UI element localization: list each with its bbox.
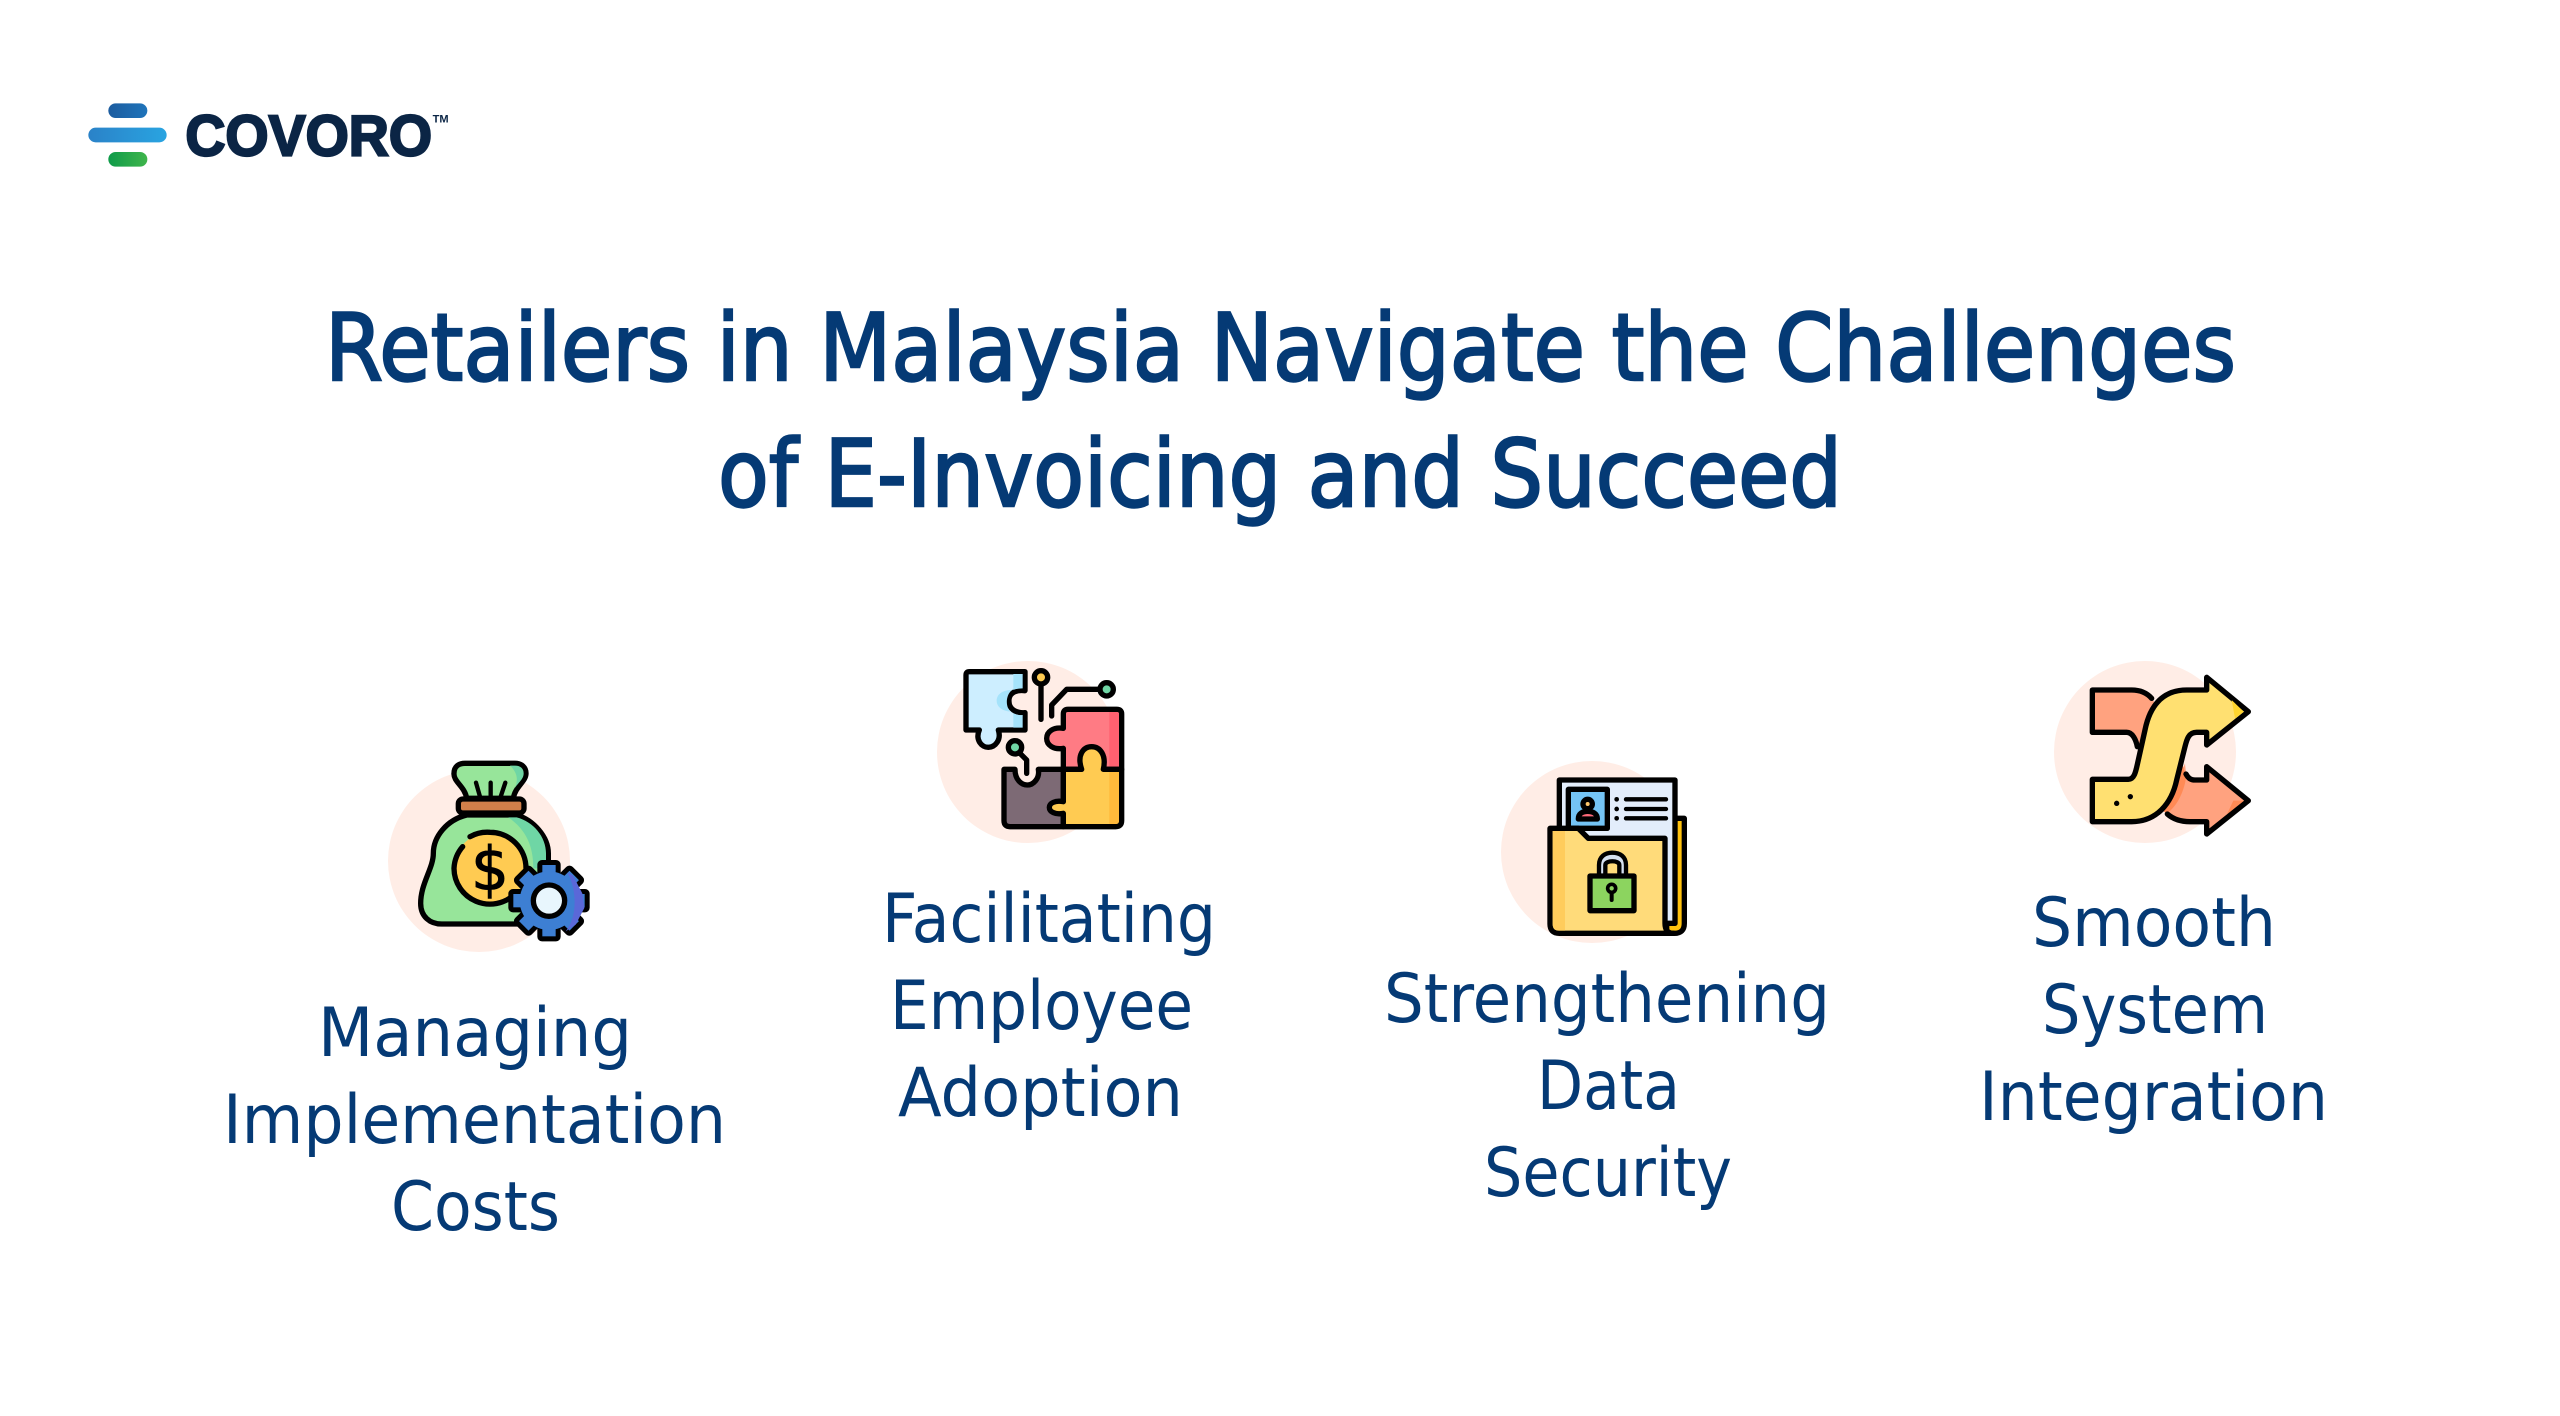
panel: Facilitating Employee Adoption — [882, 661, 1216, 1133]
label: Facilitating Employee Adoption: Adoption — [898, 1054, 1183, 1133]
panel: Smooth System Integration — [1979, 661, 2328, 1137]
label: Strengthening Data Security — [1384, 960, 1830, 1213]
label: Facilitating Employee Adoption — [882, 880, 1216, 1133]
label: Facilitating Employee Adoption: Facilitating — [882, 880, 1216, 959]
label: Strengthening Data Security: Security — [1484, 1134, 1732, 1213]
label: Strengthening Data Security: Data — [1537, 1047, 1680, 1126]
icon: locked folder — [1501, 761, 1684, 943]
panel: Strengthening Data Security — [1384, 761, 1830, 1213]
icon: puzzle pieces — [937, 661, 1122, 843]
puzzle drawing — [966, 671, 1122, 827]
title line 2: of E-Invoicing and Succeed — [718, 420, 1842, 528]
panel: Managing Implementation Costs — [223, 763, 726, 1247]
icon backdrop circle — [1501, 761, 1683, 943]
label: Managing Implementation Costs: Implementation — [223, 1081, 726, 1160]
label: Smooth System Integration: Integration — [1979, 1058, 2328, 1137]
folder drawing — [1550, 780, 1684, 933]
logo wordmark: COVORO — [185, 104, 432, 168]
label: Smooth System Integration: Smooth — [2032, 884, 2276, 963]
icon: money bag with gear — [388, 763, 587, 952]
label: Managing Implementation Costs: Managing — [318, 994, 632, 1073]
title — [325, 294, 2236, 528]
logo: Covoro — [88, 103, 449, 168]
icon backdrop circle — [937, 661, 1119, 843]
icon: crossing arrows — [2054, 661, 2248, 843]
money bag drawing: $ — [471, 834, 509, 903]
label: Facilitating Employee Adoption: Employee — [890, 967, 1193, 1046]
money bag drawing — [421, 763, 587, 939]
label: Smooth System Integration: System — [2042, 971, 2268, 1050]
logo trademark: TM — [433, 114, 449, 126]
label: Strengthening Data Security: Strengthening — [1384, 960, 1830, 1039]
icon backdrop circle — [2054, 661, 2236, 843]
label: Smooth System Integration — [1979, 884, 2328, 1137]
title line 1: Retailers in Malaysia Navigate the Challenges — [325, 294, 2236, 402]
icon backdrop circle — [388, 770, 570, 952]
logo mark: three bars — [88, 103, 167, 167]
label: Managing Implementation Costs — [223, 994, 726, 1247]
arrows drawing — [2092, 677, 2248, 834]
label: Managing Implementation Costs: Costs — [391, 1168, 560, 1247]
